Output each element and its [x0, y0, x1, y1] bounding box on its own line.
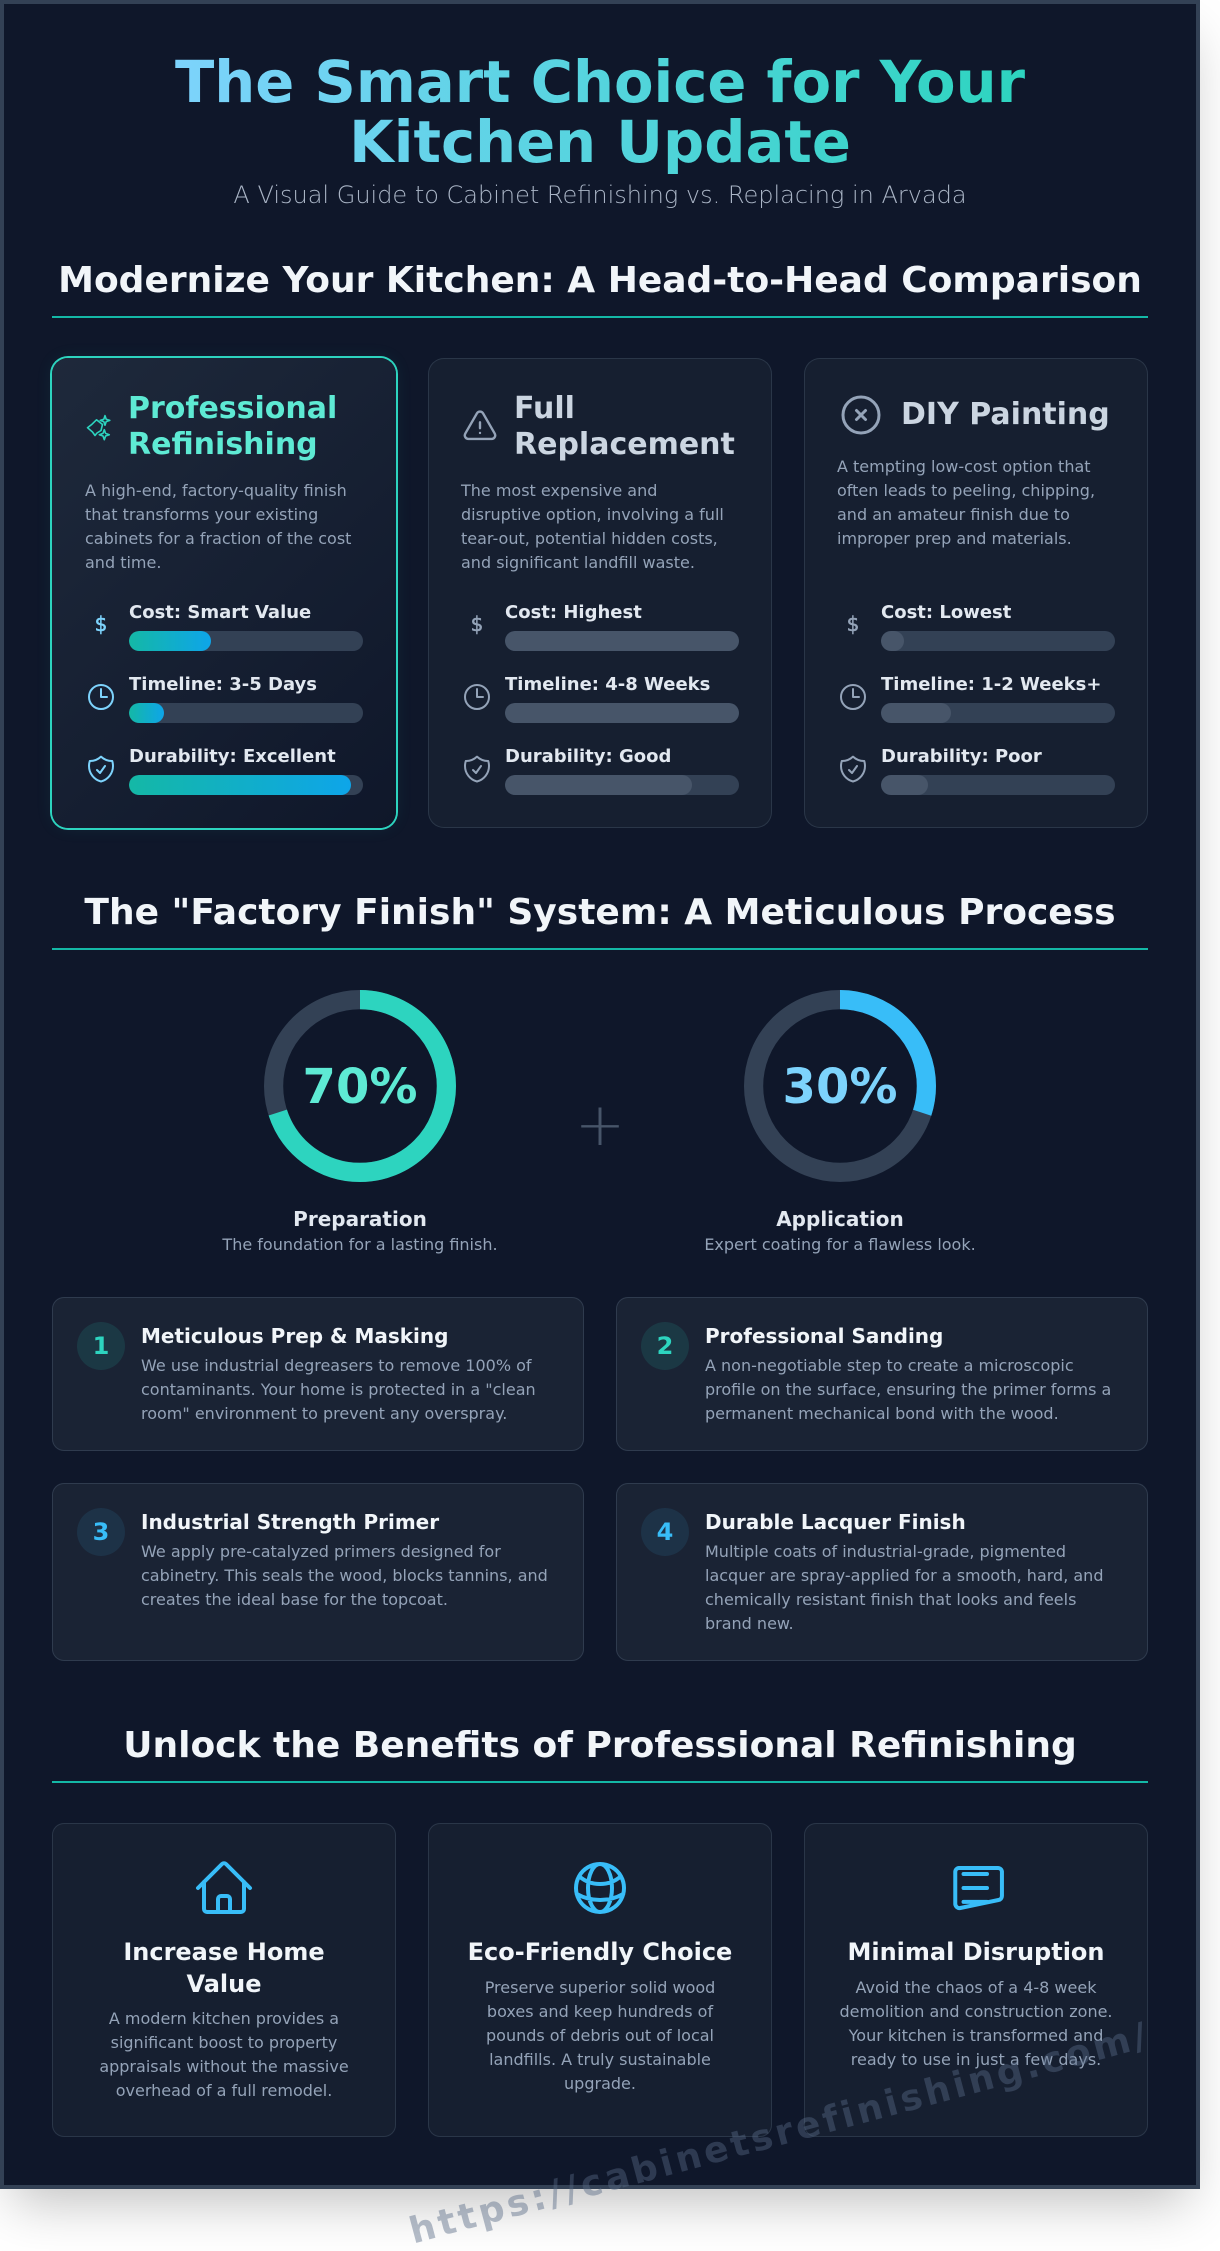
card description: improper prep and materials. [837, 529, 1072, 548]
metric: cost: $ [95, 612, 107, 636]
metric: cost [847, 602, 1115, 651]
benefit text [485, 1978, 715, 2093]
benefit title: Minimal Disruption [847, 1938, 1104, 1966]
step title: Durable Lacquer Finish [705, 1510, 966, 1534]
card description: often leads to peeling, chipping, [837, 481, 1095, 500]
card description [837, 457, 1095, 548]
card description: A high-end, factory-quality finish [85, 481, 347, 500]
benefit title [123, 1938, 325, 1998]
metric: cost: $ [847, 612, 859, 636]
metric: durability [840, 746, 1115, 795]
step 3: 3 [93, 1518, 109, 1546]
step text: cabinetry. This seals the wood, blocks tannins, and [141, 1566, 548, 1585]
benefit text: significant boost to property [111, 2033, 337, 2052]
title: The Smart Choice for Your [175, 49, 1025, 116]
card heading: Refinishing [128, 427, 318, 462]
subtitle: A Visual Guide to Cabinet Refinishing vs. Replacing in Arvada [233, 181, 967, 209]
card heading [514, 391, 735, 462]
benefit text: boxes and keep hundreds of [487, 2002, 713, 2021]
panel: eco-friendly choice [428, 1823, 772, 2137]
card description [85, 481, 351, 572]
step text: brand new. [705, 1614, 794, 1633]
panel: minimal disruption [804, 1823, 1148, 2137]
step title: Industrial Strength Primer [141, 1510, 439, 1534]
card description: and time. [85, 553, 161, 572]
card description: cabinets for a fraction of the cost [85, 529, 351, 548]
card heading: Replacement [514, 427, 735, 462]
step 4: 4 [657, 1518, 673, 1546]
step text [141, 1356, 536, 1423]
benefit text [839, 1978, 1113, 2069]
benefit text: Preserve superior solid wood [485, 1978, 715, 1997]
title: Kitchen Update [349, 109, 851, 176]
benefit title: Eco-Friendly Choice [468, 1938, 732, 1966]
section heading: comparison: Modernize Your Kitchen: A Head-to-Head Comparison [58, 260, 1142, 301]
card heading: DIY Painting [901, 397, 1110, 432]
benefit text: upgrade. [564, 2074, 636, 2093]
icon: x circle [842, 396, 880, 434]
panel: DIY painting [804, 358, 1148, 828]
step title: Meticulous Prep & Masking [141, 1324, 448, 1348]
step 1 [52, 1297, 584, 1451]
card description: The most expensive and [461, 481, 657, 500]
card heading: Professional [128, 391, 337, 426]
caption: preparation [222, 1207, 498, 1254]
step 4 [616, 1483, 1148, 1661]
caption: application: Expert coating for a flawless look. [704, 1235, 976, 1254]
metric: timeline: Timeline: 1-2 Weeks+ [881, 674, 1101, 695]
metric: timeline [88, 674, 363, 723]
card heading: Full [514, 391, 575, 426]
benefit text: appraisals without the massive [99, 2057, 349, 2076]
panel: increase home value [52, 1823, 396, 2137]
metric: cost: Cost: Smart Value [129, 602, 311, 623]
card description: and significant landfill waste. [461, 553, 695, 572]
benefit text: demolition and construction zone. [839, 2002, 1113, 2021]
icon: message panel [953, 1866, 1004, 1910]
metric: timeline [840, 674, 1115, 723]
benefit text: overhead of a full remodel. [116, 2081, 332, 2100]
card description: tear-out, potential hidden costs, [461, 529, 718, 548]
benefit text [99, 2009, 349, 2100]
step text: We apply pre-catalyzed primers designed for [141, 1542, 501, 1561]
benefit text: pounds of debris out of local [486, 2026, 714, 2045]
panel: full replacement [428, 358, 772, 828]
donut chart: 30% application [744, 990, 936, 1182]
metric: cost: Cost: Highest [505, 602, 642, 623]
metric: cost [471, 602, 739, 651]
metric: durability [88, 746, 363, 795]
step text: We use industrial degreasers to remove 100% of [141, 1356, 532, 1375]
step 3 [52, 1483, 584, 1661]
step text [141, 1542, 548, 1609]
section heading: benefits: Unlock the Benefits of Professional Refinishing [123, 1725, 1077, 1766]
card heading [128, 391, 337, 462]
step text [705, 1542, 1103, 1633]
step text: chemically resistant finish that looks and feels [705, 1590, 1076, 1609]
metric: durability [464, 746, 739, 795]
icon: sparkles [86, 414, 111, 440]
step text: A non-negotiable step to create a microscopic [705, 1356, 1074, 1375]
step 1: 1 [93, 1332, 109, 1360]
caption: preparation: Preparation [293, 1207, 427, 1231]
card description: disruptive option, involving a full [461, 505, 724, 524]
caption: application: Application [776, 1207, 904, 1231]
donut chart: 70% preparation [264, 990, 456, 1182]
step text: permanent mechanical bond with the wood. [705, 1404, 1059, 1423]
title [174, 53, 1026, 175]
card description: that transforms your existing [85, 505, 318, 524]
section heading: process: The "Factory Finish" System: A Meticulous Process [84, 892, 1116, 933]
step text: profile on the surface, ensuring the primer forms a [705, 1380, 1111, 1399]
step text: lacquer are spray-applied for a smooth, hard, and [705, 1566, 1103, 1585]
benefit text: ready to use in just a few days. [851, 2050, 1101, 2069]
step text [705, 1356, 1111, 1423]
step title: Professional Sanding [705, 1324, 943, 1348]
metric: cost [95, 602, 363, 651]
plus sign: + [575, 1090, 625, 1160]
metric: durability: Durability: Excellent [129, 746, 336, 767]
step text: creates the ideal base for the topcoat. [141, 1590, 448, 1609]
step 2 [616, 1297, 1148, 1451]
donut chart: 70% preparation: 70% [303, 1059, 417, 1115]
metric: cost: $ [471, 612, 483, 636]
metric: timeline: Timeline: 3-5 Days [129, 674, 317, 695]
step text: contaminants. Your home is protected in a "clean [141, 1380, 536, 1399]
metric: durability: Durability: Good [505, 746, 671, 767]
watermark url: https://cabinetsrefinishing.com/ [405, 2015, 1155, 2251]
benefit title: Increase Home [123, 1938, 325, 1966]
benefit text: A modern kitchen provides a [109, 2009, 339, 2028]
metric: timeline [464, 674, 739, 723]
benefit text: Avoid the chaos of a 4-8 week [856, 1978, 1096, 1997]
panel: professional refinishing [52, 358, 396, 828]
icon: warning triangle [464, 410, 496, 440]
icon: globe [574, 1862, 626, 1914]
step 2: 2 [657, 1332, 673, 1360]
caption: application [704, 1207, 976, 1254]
metric: durability: Durability: Poor [881, 746, 1042, 767]
metric: cost: Cost: Lowest [881, 602, 1011, 623]
card description: A tempting low-cost option that [837, 457, 1091, 476]
donut chart: 30% application: 30% [783, 1059, 897, 1115]
card description [460, 481, 724, 572]
benefit text: landfills. A truly sustainable [489, 2050, 711, 2069]
benefit title: Value [186, 1970, 262, 1998]
step text: room" environment to prevent any overspray. [141, 1404, 507, 1423]
icon: house [196, 1861, 252, 1914]
step text: Multiple coats of industrial-grade, pigmented [705, 1542, 1066, 1561]
metric: timeline: Timeline: 4-8 Weeks [505, 674, 710, 695]
card description: and an amateur finish due to [837, 505, 1070, 524]
caption: preparation: The foundation for a lasting finish. [222, 1235, 498, 1254]
benefit text: Your kitchen is transformed and [849, 2026, 1103, 2045]
